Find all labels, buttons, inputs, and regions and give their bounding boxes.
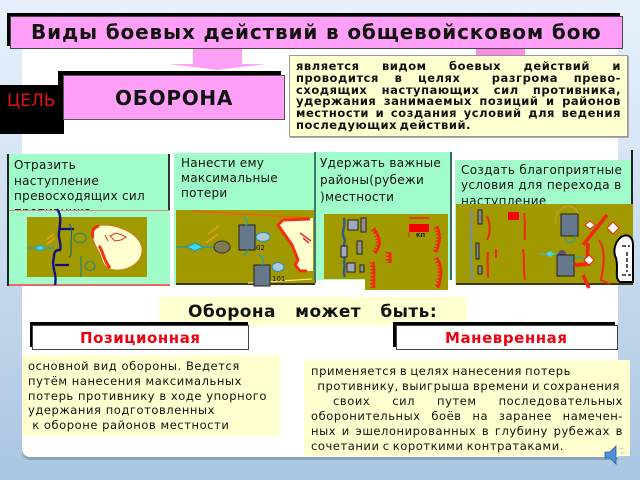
- heading: Оборона может быть: Оборона может быть:: [188, 302, 437, 322]
- text block: positional defense: к обороне районов местности: [32, 418, 229, 432]
- text block: maneuver defense: [304, 360, 630, 456]
- label: ЦЕЛЬ: [0, 85, 64, 134]
- panel: goal 2: потери: [181, 186, 227, 200]
- panel: goal 4: [455, 160, 633, 285]
- text block: positional defense: [22, 355, 280, 436]
- panel: goal 1: превосходящих сил: [14, 189, 145, 203]
- text block: maneuver defense: сочетании с короткими контратаками.: [311, 439, 564, 453]
- panel: goal 3: )местности: [320, 190, 394, 204]
- text block: maneuver defense: противнику, выигрыша времени и сохранения: [317, 379, 620, 393]
- text block: positional defense: путём нанесения максимальных: [28, 374, 242, 388]
- map 4 background: [456, 204, 633, 285]
- definition text block: [289, 55, 628, 137]
- panel: goal 3: [314, 152, 452, 280]
- panel: goal 4: условия для перехода в: [461, 178, 622, 192]
- text block: positional defense: основной вид обороны. Ведется: [28, 359, 240, 373]
- map graphic 4: [470, 206, 634, 289]
- panel: goal 1: наступление: [14, 174, 99, 188]
- definition text block: является видом боевых действий и: [296, 59, 621, 73]
- text block: maneuver defense: своих сил путем последовательных: [333, 394, 623, 408]
- arrow: pink down arrow: [170, 49, 266, 70]
- panel 4 right edge line: [631, 150, 633, 204]
- panel: goal 3: Удержать важные: [320, 156, 441, 170]
- text block: maneuver defense: оборонительных боёв на заранее намечен-: [311, 409, 623, 423]
- type: Маневренная: Маневренная: [445, 329, 568, 347]
- map graphic 2: 02: [256, 244, 265, 252]
- definition text block: удержания занимаемых позиций и районов: [296, 94, 621, 108]
- map graphic 3: [324, 214, 448, 290]
- panel: goal 2: максимальные: [181, 171, 278, 185]
- map graphic 1: [27, 208, 147, 286]
- panel: goal 4: Создать благоприятные: [461, 163, 622, 177]
- type: Маневренная: [393, 322, 618, 350]
- panel: goal 1: противника: [14, 204, 92, 218]
- definition text block: местности и создания условий для ведения: [296, 106, 621, 120]
- definition text block: проводится в целях разгрома прево-: [296, 71, 621, 85]
- text block: maneuver defense: применяется в целях нанесения потерь: [311, 364, 571, 378]
- title: [7, 13, 623, 49]
- map graphic 2: [176, 210, 315, 286]
- pink connector tab: [476, 46, 525, 56]
- panel: goal 2: [174, 153, 316, 285]
- text block: positional defense: потерь противнику в ходе упорного: [28, 389, 267, 403]
- icon: speaker: [604, 445, 625, 465]
- definition text block: последующих действий.: [296, 118, 471, 132]
- map graphic 2: 101: [272, 275, 285, 283]
- title: Виды боевых действий в общевойсковом бою: [31, 20, 602, 44]
- text block: positional defense: удержания подготовленных: [28, 403, 215, 417]
- heading: Оборона может быть: [159, 297, 467, 326]
- map graphic 3: КП: [416, 233, 425, 239]
- panel: goal 2: Нанести ему: [181, 156, 264, 170]
- heading: ОБОРОНА: ОБОРОНА: [115, 86, 233, 110]
- map 1 frame: [7, 210, 170, 286]
- panel: goal 1: [7, 154, 170, 286]
- text block: maneuver defense: ных и эшелонированных в глубину рубежах в: [311, 424, 623, 438]
- panel: goal 4: наступление: [461, 194, 547, 208]
- panel: goal 1: Отразить: [14, 158, 76, 172]
- type: Позиционная: [30, 322, 249, 350]
- panel: goal 3: районы(рубежи: [320, 173, 424, 187]
- heading: ОБОРОНА: [58, 71, 285, 120]
- definition text block: сходящих наступающих сил противника,: [296, 82, 621, 96]
- label: ЦЕЛЬ: ЦЕЛЬ: [7, 91, 55, 111]
- type: Позиционная: Позиционная: [80, 329, 201, 347]
